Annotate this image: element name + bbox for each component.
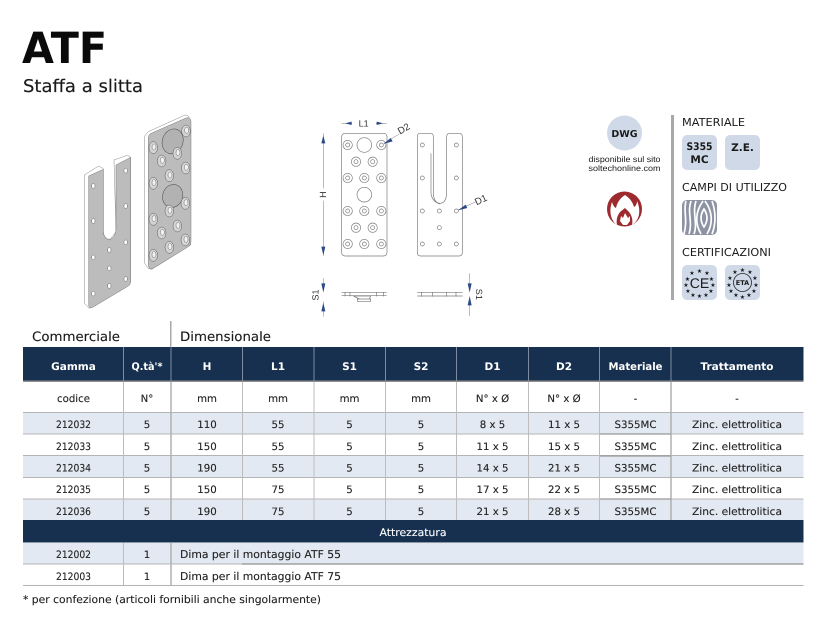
plate with embossed holes — [145, 115, 191, 269]
row 212034: S355MC — [614, 464, 656, 474]
badge: Z.E.: Z.E. — [731, 142, 754, 154]
row 212032 — [56, 420, 782, 431]
icon: ETA mark: ★ — [726, 282, 732, 289]
side views — [342, 292, 463, 301]
row 212033: 212033 — [56, 442, 91, 453]
row 212032: S355MC — [614, 420, 656, 431]
icon: wood — [682, 200, 717, 235]
subtitle: Staffa a slitta — [23, 77, 143, 97]
icon: CE mark: ★ — [708, 288, 714, 295]
units row: N° x Ø — [547, 394, 581, 405]
row 212033: 5 — [144, 442, 150, 453]
badge: Z.E. — [725, 135, 760, 170]
dimension D2: D2 — [396, 121, 412, 137]
row 212036: 5 — [144, 507, 150, 518]
icon: ETA mark — [725, 265, 760, 301]
row 212034 — [56, 464, 782, 474]
icon: CE mark: ★ — [709, 276, 714, 283]
row 212034: 5 — [144, 464, 150, 474]
row 212036: 190 — [197, 507, 217, 518]
table header: H — [203, 361, 211, 373]
row 212036: 212036 — [56, 507, 91, 518]
units row: mm — [340, 394, 359, 405]
row 212036: 5 — [418, 507, 424, 518]
row 212032: 55 — [272, 420, 284, 431]
rear view with slot and D1 holes — [417, 133, 462, 256]
row 212033: 11 x 5 — [477, 442, 508, 453]
section heading: dimensionale: Dimensionale — [180, 330, 271, 345]
units row: mm — [268, 394, 288, 405]
dimension L1 — [342, 119, 387, 129]
row 212002: 1 — [144, 550, 150, 561]
icon: ETA mark: ★ — [727, 275, 733, 282]
row 212032: 11 x 5 — [548, 420, 580, 431]
row 212033: 5 — [346, 442, 353, 453]
row 212002 — [56, 548, 341, 561]
table header: S1 — [342, 361, 357, 373]
grid lines — [23, 382, 804, 586]
dimension S1 left — [311, 278, 325, 317]
row 212032: 5 — [346, 420, 353, 431]
icon: CE mark: ★ — [704, 270, 710, 277]
row 212034: 5 — [346, 464, 353, 474]
row 212036: 5 — [346, 507, 353, 518]
row 212035: 5 — [346, 485, 353, 496]
row 212035: 75 — [272, 485, 284, 496]
icon: ETA mark: ★ — [740, 267, 745, 274]
dimension L1: L1 — [359, 119, 369, 129]
icon: CE mark: ★ — [685, 276, 690, 283]
row 212032: Zinc. elettrolitica — [692, 420, 782, 431]
band: attrezzatura: Attrezzatura — [380, 527, 446, 539]
dimension D2 — [383, 121, 412, 144]
row 212036: S355MC — [614, 507, 656, 518]
icon: CE mark: ★ — [689, 270, 695, 277]
icon: ETA mark: ★ — [732, 269, 738, 276]
row 212032: 5 — [418, 420, 424, 431]
3D view of the brackets — [84, 115, 191, 308]
row 212036: 21 x 5 — [477, 507, 508, 518]
dimension H: H — [318, 191, 328, 198]
row 212034: 55 — [272, 464, 284, 474]
table header: Q.tà'* — [132, 361, 163, 373]
heading: certificazioni: CERTIFICAZIONI — [682, 246, 771, 259]
icon: CE mark: ★ — [697, 268, 702, 275]
icon: ETA mark: ★ — [752, 275, 758, 282]
row 212035 — [56, 485, 782, 496]
dimension H — [318, 133, 328, 256]
row 212032: 5 — [144, 420, 150, 431]
DWG badge: DWG — [611, 129, 638, 140]
icon: CE mark: CE — [690, 275, 709, 291]
icon: CE mark: ★ — [697, 293, 702, 300]
row 212033: S355MC — [614, 442, 656, 453]
row 212033: 15 x 5 — [548, 442, 580, 453]
table header: Trattamento — [700, 361, 774, 373]
icon: ETA mark: ★ — [753, 282, 759, 289]
row 212003 — [56, 570, 341, 583]
dimension S1 left: S1 — [311, 289, 321, 300]
badge: S355 MC — [682, 135, 717, 170]
dimension D1 — [458, 193, 489, 210]
row 212034: 14 x 5 — [477, 464, 508, 474]
heading: campi di utilizzo: CAMPI DI UTILIZZO — [682, 181, 787, 194]
units row: codice — [57, 394, 90, 405]
specification table — [23, 347, 804, 586]
row 212035: S355MC — [614, 485, 656, 496]
row 212035: 212035 — [56, 485, 91, 496]
row 212036: 75 — [272, 507, 284, 518]
section heading: commerciale: Commerciale — [32, 330, 120, 345]
row 212034: 5 — [418, 464, 424, 474]
row 212002: 212002 — [56, 550, 91, 561]
row 212033: 55 — [272, 442, 284, 453]
row 212032: 110 — [197, 420, 217, 431]
DWG availability note — [588, 155, 661, 173]
icon: CE mark: ★ — [703, 292, 709, 299]
row 212035: 17 x 5 — [477, 485, 508, 496]
table header — [23, 347, 804, 382]
icon: ETA mark: ★ — [740, 294, 745, 301]
title: ATF — [22, 24, 107, 74]
row stripes — [23, 413, 804, 564]
units row: mm — [411, 394, 431, 405]
row 212036: 28 x 5 — [548, 507, 580, 518]
units row: mm — [197, 394, 217, 405]
technical drawing — [311, 119, 489, 317]
icon: CE mark: ★ — [690, 292, 696, 299]
table header: Materiale — [608, 361, 662, 373]
icon: CE mark: ★ — [710, 282, 716, 289]
icon: ETA mark: ★ — [746, 292, 752, 299]
heading: materiale: MATERIALE — [682, 116, 745, 129]
dimension S1 right — [468, 273, 484, 316]
DWG badge — [607, 116, 642, 150]
DWG availability note: disponibile sul sito — [588, 155, 661, 164]
table header: D2 — [556, 361, 572, 373]
table header: S2 — [414, 361, 428, 373]
row 212034: Zinc. elettrolitica — [692, 464, 782, 474]
row 212035: 150 — [197, 485, 217, 496]
dimension D1: D1 — [473, 193, 489, 207]
units row: N° x Ø — [476, 394, 509, 405]
section divider — [170, 321, 172, 347]
slotted plate — [84, 155, 131, 308]
row 212032: 8 x 5 — [480, 420, 505, 431]
DWG availability note: soltechonline.com — [588, 164, 661, 173]
row 212036 — [56, 507, 782, 518]
icon: ETA mark: ★ — [747, 269, 753, 276]
row 212033 — [56, 442, 782, 453]
row 212003: Dima per il montaggio ATF 75 — [180, 570, 341, 583]
units row: - — [735, 394, 739, 405]
units row: - — [634, 394, 638, 405]
row 212034: 190 — [197, 464, 217, 474]
row 212032: 212032 — [56, 420, 91, 431]
dimension S1 right: S1 — [474, 289, 484, 300]
row 212035: 5 — [418, 485, 424, 496]
units row — [57, 394, 739, 405]
table header: Gamma — [51, 361, 96, 373]
icon: ETA mark: ★ — [751, 288, 757, 295]
icon: CE mark — [682, 265, 717, 300]
row 212033: Zinc. elettrolitica — [692, 442, 782, 453]
badge: S355 MC: S355 — [686, 141, 712, 153]
footnote: * per confezione (articoli fornibili anche singolarmente) — [23, 594, 321, 606]
table header: L1 — [271, 361, 285, 373]
front view with D2 holes — [342, 133, 387, 256]
row 212035: Zinc. elettrolitica — [692, 485, 782, 496]
badge: S355 MC: MC — [690, 154, 709, 166]
icon: fire resistance — [607, 192, 642, 226]
icon: CE mark: ★ — [683, 282, 689, 289]
vertical divider — [671, 115, 674, 300]
table header: D1 — [484, 361, 501, 373]
icon: ETA mark: ★ — [733, 292, 739, 299]
icon: ETA mark: ETA — [736, 279, 749, 287]
row 212034: 21 x 5 — [548, 464, 580, 474]
row 212033: 5 — [418, 442, 424, 453]
icon: ETA mark: ★ — [728, 288, 734, 295]
row 212035: 22 x 5 — [548, 485, 580, 496]
units row: N° — [141, 394, 153, 405]
row 212036: Zinc. elettrolitica — [692, 507, 782, 518]
row 212003: 212003 — [56, 572, 91, 583]
icon: CE mark: ★ — [685, 288, 691, 295]
row 212002: Dima per il montaggio ATF 55 — [180, 548, 341, 561]
band: attrezzatura — [23, 520, 804, 542]
row 212034: 212034 — [56, 464, 91, 474]
row 212003: 1 — [144, 572, 150, 583]
row 212033: 150 — [197, 442, 217, 453]
row 212035: 5 — [144, 485, 150, 496]
